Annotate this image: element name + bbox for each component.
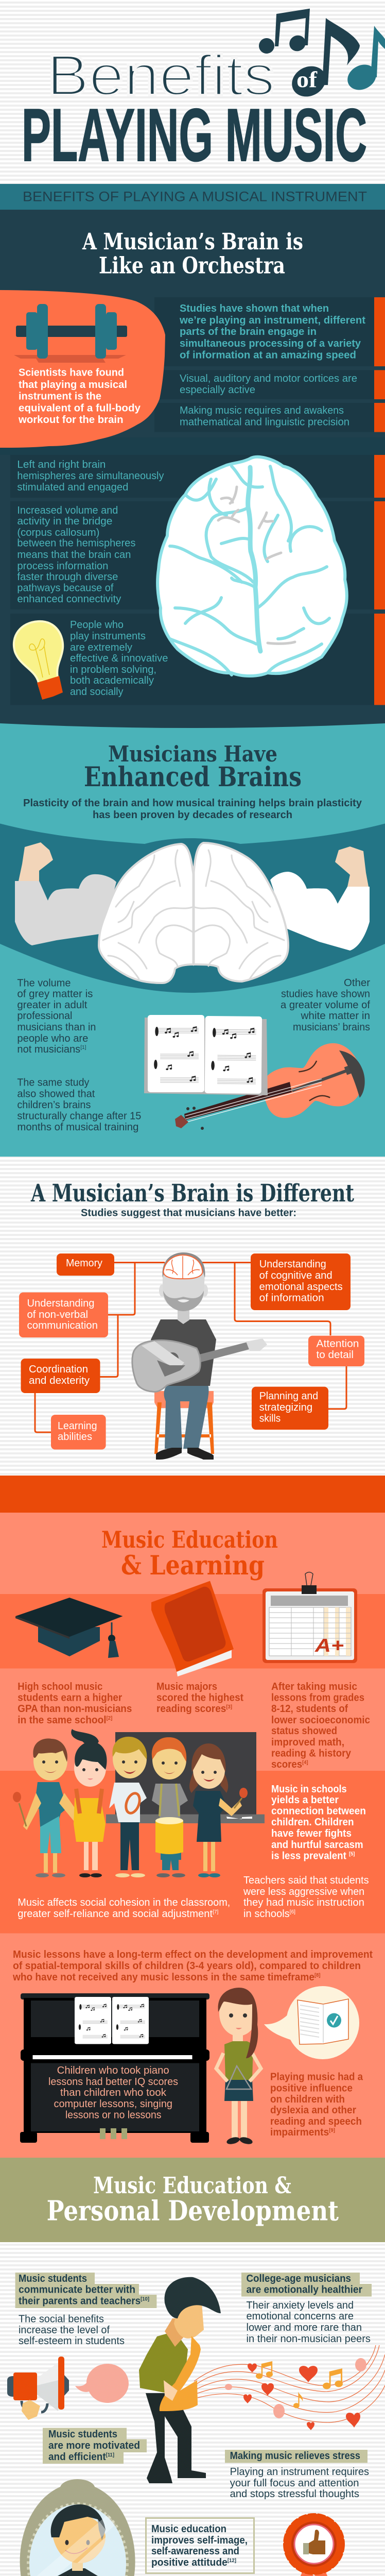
panel: personal development content bbox=[0, 2242, 385, 2576]
text: workout: Scientists have found bbox=[19, 367, 124, 379]
illustration: right arm bbox=[270, 846, 370, 951]
panel: personal development heading: Personal Development bbox=[47, 2195, 339, 2227]
text: socioeconomic: reading & history bbox=[271, 1748, 352, 1759]
icon: large note with the word of bbox=[287, 18, 360, 103]
text: spatial-temporal: [8] bbox=[314, 1973, 321, 1978]
text: communicate better: [10] bbox=[141, 2297, 149, 2302]
head and neck bbox=[159, 1252, 208, 1324]
text: motivated bbox=[48, 2429, 140, 2463]
icon: megaphone bbox=[7, 2357, 69, 2420]
text: white matter: studies have shown bbox=[281, 989, 370, 1000]
guitar bbox=[132, 1338, 267, 1392]
text: simultaneous processing: parts of the brain engage in bbox=[180, 326, 317, 337]
box: cognitive bbox=[251, 1253, 351, 1310]
illustration: girl with maraca bbox=[189, 1743, 248, 1877]
text: spatial-temporal: of spatial-temporal skills of children (3-4 years old), compared to children bbox=[13, 1960, 361, 1972]
icon: brain in head bbox=[163, 1255, 202, 1279]
illustration: boy with drum bbox=[152, 1737, 188, 1877]
illustration: boy with tambourine bbox=[109, 1737, 147, 1877]
heading: & Learning bbox=[121, 1550, 265, 1581]
panel: title header bbox=[0, 0, 385, 184]
text: plasticity: Plasticity of the brain and how musical training helps brain plasticity bbox=[23, 798, 362, 809]
text: subhead: Studies suggest that musicians have better: bbox=[81, 1208, 296, 1219]
heading: A Musician’s Brain is bbox=[82, 229, 303, 255]
text: mathematical precision bbox=[180, 405, 349, 428]
text: anxiety levels: in their non-musician peers bbox=[246, 2333, 371, 2345]
title: Benefits: Benefits bbox=[47, 43, 275, 107]
box: self-image bbox=[146, 2518, 254, 2573]
text: full focus: and stops stressful thoughts bbox=[230, 2488, 359, 2500]
text: cortices: especially active bbox=[180, 384, 255, 396]
text: grey matter: The volume bbox=[17, 977, 71, 989]
text: motivated: are more motivated bbox=[48, 2440, 140, 2451]
text: motivated: [11] bbox=[106, 2452, 114, 2458]
text: socioeconomic: 8-12, students of bbox=[271, 1703, 348, 1715]
text: IQ scores: computer lessons, singing bbox=[54, 2098, 172, 2110]
box: non-verbal: Understanding bbox=[27, 1298, 95, 1309]
panel: a musician's brain is different bbox=[0, 1157, 385, 1476]
text: corpus callosum: faster through diverse bbox=[17, 571, 118, 583]
text: teachers: they had music instruction bbox=[243, 1897, 364, 1908]
subtitle band: BENEFITS OF PLAYING A MUSICAL INSTRUMENT bbox=[23, 189, 367, 204]
text: simultaneous processing: we’re playing an instrument, different bbox=[179, 315, 365, 326]
heading bbox=[101, 1526, 278, 1581]
icon: report card with A plus: A+ bbox=[314, 1635, 344, 1656]
text: structural change bbox=[17, 1077, 141, 1133]
box: learning bbox=[51, 1415, 106, 1450]
text: corpus callosum: Increased volume and bbox=[17, 505, 118, 516]
illustration: large brain bbox=[99, 843, 288, 983]
text: communicate better: Music students bbox=[19, 2273, 87, 2284]
box: memory: Memory bbox=[66, 1258, 102, 1269]
text: emotionally healthier bbox=[246, 2273, 362, 2296]
text: people who play: People who bbox=[70, 619, 124, 631]
text: anxiety levels: Their anxiety levels and bbox=[246, 2300, 354, 2311]
text: hemispheres bbox=[17, 459, 164, 493]
text: corpus callosum: process information bbox=[17, 561, 108, 572]
text: relieves stress: Making music relieves stress bbox=[230, 2450, 360, 2462]
icon: pink speech bubble bbox=[75, 2364, 129, 2403]
box: attention: Attention bbox=[316, 1338, 359, 1350]
text: corpus callosum bbox=[17, 505, 135, 605]
panel: music education and learning bbox=[0, 1476, 385, 2158]
icon: report card with A plus bbox=[262, 1572, 357, 1663]
heading: Music Education bbox=[101, 1526, 278, 1553]
text: connection between children: yields a better bbox=[271, 1794, 339, 1806]
box: non-verbal: communication bbox=[27, 1320, 98, 1331]
text: corpus callosum: pathways because of bbox=[17, 582, 114, 594]
text: socioeconomic: lessons from grades bbox=[271, 1692, 364, 1703]
text: reading scores bbox=[156, 1681, 243, 1715]
heading bbox=[84, 741, 302, 793]
text: grey matter: not musicians bbox=[17, 1044, 80, 1055]
illustration: open sheet music book bbox=[144, 1015, 268, 1095]
text: white matter: a greater volume of bbox=[281, 999, 370, 1011]
box: coordination: Coordination bbox=[29, 1364, 88, 1375]
text: grey matter bbox=[17, 977, 96, 1055]
heading: Musicians Have bbox=[108, 741, 277, 767]
text: full focus: Playing an instrument requires bbox=[230, 2466, 369, 2478]
text: mathematical precision: Making music requires and awakens bbox=[180, 405, 344, 416]
text: socioeconomic bbox=[271, 1681, 370, 1770]
box: learning: abilities bbox=[58, 1431, 92, 1443]
text: workout: equivalent of a full-body bbox=[19, 402, 141, 414]
text: self-esteem: self-esteem in students bbox=[19, 2335, 125, 2347]
text: grey matter: greater in adult bbox=[17, 999, 87, 1011]
text: anxiety levels: lower and more rare than bbox=[246, 2322, 362, 2333]
text: IQ scores bbox=[48, 2065, 178, 2121]
icon: large note with the word of: of bbox=[296, 67, 318, 92]
stool bbox=[154, 1391, 214, 1454]
text: teachers: Teachers said that students bbox=[243, 1875, 369, 1886]
torso bbox=[151, 1319, 216, 1386]
text: people who play: both academically bbox=[70, 675, 154, 686]
text: social cohesion bbox=[18, 1897, 230, 1920]
illustration: brain top view bbox=[157, 457, 347, 676]
text: plasticity bbox=[23, 798, 362, 821]
text: anxiety levels: emotional concerns are bbox=[246, 2311, 354, 2322]
text: structural change: also showed that bbox=[17, 1088, 95, 1099]
box: planning: skills bbox=[259, 1413, 281, 1425]
text: anxiety levels bbox=[246, 2300, 371, 2345]
text: structural change: months of musical training bbox=[17, 1122, 138, 1133]
text: socioeconomic: improved math, bbox=[271, 1737, 344, 1748]
box: memory bbox=[57, 1253, 114, 1276]
text: self-esteem: increase the level of bbox=[19, 2325, 110, 2336]
heading: Enhanced Brains bbox=[84, 761, 302, 793]
text: structural change: The same study bbox=[17, 1077, 89, 1088]
box: planning: strategizing bbox=[259, 1402, 312, 1413]
text: GPA: GPA than non-musicians bbox=[18, 1703, 132, 1715]
text: white matter: Other bbox=[344, 977, 370, 989]
icon: rosette with thumb up bbox=[284, 2514, 344, 2576]
text: dyslexia: reading and speech bbox=[270, 2116, 362, 2127]
text: structural change: structurally change after 15 bbox=[17, 1111, 141, 1122]
illustration: left arm bbox=[15, 842, 116, 945]
text: social cohesion: greater self-reliance and social adjustment bbox=[18, 1908, 211, 1920]
text: socioeconomic: After taking music bbox=[271, 1681, 357, 1692]
panel: workout callout bbox=[0, 290, 165, 448]
icon: barbell bbox=[14, 304, 127, 363]
text: hemispheres: stimulated and engaged bbox=[17, 482, 128, 493]
text: self-esteem bbox=[19, 2313, 125, 2347]
text: social cohesion: Music affects social cohesion in the classroom, bbox=[18, 1897, 230, 1908]
text: corpus callosum: (corpus callosum) bbox=[17, 527, 99, 538]
illustration: guitarist on a stool bbox=[132, 1252, 267, 1460]
text: corpus callosum: enhanced connectivity bbox=[17, 594, 121, 605]
box: cognitive: emotional aspects bbox=[259, 1281, 343, 1293]
icon: book bbox=[151, 1581, 234, 1676]
text: workout: workout for the brain bbox=[18, 414, 124, 426]
icon: graduation cap bbox=[15, 1598, 122, 1658]
text: spatial-temporal: Music lessons have a long-term effect on the development and improvement bbox=[13, 1949, 373, 1960]
callout bars bbox=[13, 2273, 379, 2576]
jeans bbox=[164, 1381, 209, 1449]
heading bbox=[82, 229, 303, 279]
box: self-image: improves self-image, bbox=[151, 2535, 248, 2546]
text: socioeconomic: scores bbox=[271, 1759, 305, 1770]
box: coordination bbox=[21, 1359, 100, 1393]
text: people who play bbox=[70, 619, 168, 698]
text: grey matter: people who are bbox=[17, 1033, 88, 1044]
text: dyslexia: dyslexia and other bbox=[270, 2105, 356, 2116]
text: white matter: musicians’ brains bbox=[293, 1022, 370, 1033]
text: IQ scores: than children who took bbox=[60, 2087, 167, 2098]
illustration: speech bubble with book bbox=[264, 1986, 359, 2059]
text: structural change: children’s brains bbox=[17, 1099, 91, 1111]
text: reading scores: scored the highest bbox=[156, 1692, 243, 1703]
illustration: upright piano bbox=[20, 1993, 209, 2143]
connector lines bbox=[35, 1262, 346, 1432]
text: IQ scores: lessons or no lessons bbox=[65, 2109, 162, 2121]
box: self-image: Music education bbox=[151, 2523, 226, 2535]
illustration: music staff with hearts bbox=[194, 2345, 385, 2430]
illustration: girl with triangle bbox=[216, 1988, 261, 2145]
text: people who play: in problem solving, bbox=[70, 664, 156, 675]
text: grey matter: [1] bbox=[80, 1045, 86, 1050]
text: connection between children: is less prevalent bbox=[271, 1851, 352, 1862]
icon: teal note bbox=[343, 26, 385, 95]
box: non-verbal: of non-verbal bbox=[27, 1309, 88, 1320]
text: GPA: in the same school bbox=[18, 1715, 110, 1726]
text: workout: instrument is the bbox=[19, 391, 101, 402]
text: social cohesion: [7] bbox=[213, 1909, 219, 1915]
text: motivated: and efficient bbox=[48, 2451, 109, 2463]
text: full focus: your full focus and attention bbox=[230, 2478, 359, 2489]
panel: personal development heading bbox=[0, 2158, 385, 2242]
text: white matter bbox=[281, 977, 370, 1033]
shoes bbox=[156, 1448, 214, 1460]
panel: personal development heading: Music Education & bbox=[93, 2173, 291, 2199]
text: dyslexia: impairments bbox=[270, 2127, 331, 2138]
text: communicate better: their parents and teachers bbox=[19, 2296, 147, 2307]
text: simultaneous processing bbox=[179, 303, 365, 361]
illustration: violin bbox=[175, 1036, 372, 1130]
text: dyslexia bbox=[270, 2072, 363, 2138]
text: teachers bbox=[243, 1875, 369, 1920]
text: grey matter: professional bbox=[17, 1010, 72, 1022]
box: planning: Planning and bbox=[259, 1391, 318, 1402]
text: reading scores: reading scores bbox=[156, 1703, 230, 1715]
text: communicate better: communicate better with bbox=[19, 2284, 135, 2296]
text: corpus callosum: between the hemispheres bbox=[17, 538, 135, 549]
box: cognitive: Understanding bbox=[259, 1259, 326, 1270]
text: full focus bbox=[230, 2466, 369, 2500]
text: cortices bbox=[180, 373, 357, 396]
text: emotionally healthier: College-age musicians bbox=[246, 2273, 351, 2284]
text: connection between children: [5] bbox=[349, 1852, 355, 1857]
text: teachers: [6] bbox=[290, 1909, 295, 1915]
text: GPA: High school music bbox=[18, 1681, 102, 1692]
text: GPA: students earn a higher bbox=[18, 1692, 122, 1703]
text: simultaneous processing: simultaneous processing of a variety bbox=[180, 338, 361, 349]
text: corpus callosum: activity in the bridge bbox=[17, 516, 112, 527]
text: GPA bbox=[18, 1681, 132, 1726]
text: self-esteem: The social benefits bbox=[19, 2313, 104, 2325]
text: IQ scores: Children who took piano bbox=[57, 2065, 169, 2076]
text: workout: that playing a musical bbox=[19, 379, 127, 391]
text: reading scores: [3] bbox=[226, 1704, 232, 1710]
background band bbox=[0, 823, 385, 993]
text: socioeconomic: lower socioeconomic bbox=[271, 1715, 370, 1726]
box: self-image: self-awareness and bbox=[151, 2546, 239, 2557]
box: learning: Learning bbox=[58, 1420, 97, 1432]
text: motivated: Music students bbox=[48, 2429, 117, 2440]
box: planning bbox=[252, 1387, 328, 1430]
text: dyslexia: on children with bbox=[270, 2094, 345, 2105]
heading: Like an Orchestra bbox=[99, 253, 285, 279]
text: spatial-temporal bbox=[12, 1949, 373, 1983]
orange side strips bbox=[374, 297, 385, 705]
text: hemispheres: hemispheres are simultaneously bbox=[17, 470, 164, 482]
panel: musicians have enhanced brains bbox=[0, 723, 385, 1157]
text: connection between children: have fewer fights bbox=[271, 1828, 352, 1839]
row backgrounds bbox=[10, 297, 374, 705]
text: socioeconomic: status showed bbox=[271, 1725, 337, 1737]
text: cortices: Visual, auditory and motor cortices are bbox=[180, 373, 357, 384]
text: connection between children: connection between bbox=[271, 1806, 366, 1817]
box: attention bbox=[308, 1336, 364, 1366]
text: people who play: effective & innovative bbox=[70, 653, 168, 664]
text: dyslexia: [9] bbox=[329, 2128, 335, 2133]
text: connection between children: Music in schools bbox=[271, 1784, 347, 1795]
text: white matter: white matter in bbox=[300, 1010, 370, 1022]
illustration: girl in yellow dress bbox=[71, 1729, 107, 1877]
text: spatial-temporal: who have not received any music lessons in the same timeframe bbox=[13, 1972, 329, 1983]
text: mathematical precision: mathematical and linguistic precision bbox=[180, 416, 349, 428]
illustration: blackboard bbox=[106, 1732, 265, 1823]
text: hemispheres: Left and right brain bbox=[17, 459, 106, 470]
text: simultaneous processing: of information at an amazing speed bbox=[180, 350, 356, 361]
text: grey matter: musicians than in bbox=[17, 1022, 96, 1033]
text: GPA: [2] bbox=[107, 1716, 112, 1721]
text: communicate better bbox=[19, 2273, 149, 2307]
text: reading scores: Music majors bbox=[156, 1681, 217, 1692]
box: self-image: positive attitude bbox=[151, 2557, 230, 2568]
box: non-verbal bbox=[19, 1292, 108, 1337]
text: socioeconomic: [4] bbox=[302, 1760, 308, 1766]
box: cognitive: of cognitive and bbox=[259, 1270, 332, 1281]
subtitle band bbox=[0, 184, 385, 210]
icon: light bulb bbox=[14, 621, 63, 700]
text: plasticity: has been proven by decades of research bbox=[93, 809, 292, 821]
icon: beamed music notes bbox=[256, 9, 310, 56]
box: cognitive: of information bbox=[259, 1292, 324, 1303]
text: people who play: are extremely bbox=[70, 642, 132, 653]
text: dyslexia: Playing music had a bbox=[270, 2072, 363, 2083]
box: self-image: [12] bbox=[227, 2558, 236, 2564]
text: connection between children: children. Children bbox=[271, 1817, 354, 1828]
text: grey matter: of grey matter is bbox=[17, 989, 93, 1000]
text: simultaneous processing: Studies have shown that when bbox=[180, 303, 329, 314]
text: emotionally healthier: are emotionally healthier bbox=[246, 2284, 362, 2296]
panel: brain is like an orchestra bbox=[0, 210, 385, 733]
text: dyslexia: positive influence bbox=[270, 2083, 353, 2094]
box: coordination: and dexterity bbox=[29, 1375, 90, 1386]
text: people who play: and socially bbox=[70, 686, 124, 698]
text: teachers: were less aggressive when bbox=[243, 1886, 364, 1897]
text: teachers: in schools bbox=[243, 1908, 289, 1920]
illustration: saxophone player bbox=[139, 2277, 221, 2483]
text: workout bbox=[18, 367, 141, 426]
text: people who play: play instruments bbox=[70, 631, 146, 642]
text: connection between children bbox=[271, 1784, 366, 1862]
text: IQ scores: lessons had better IQ scores bbox=[48, 2076, 178, 2088]
box: attention: to detail bbox=[316, 1349, 354, 1361]
illustration: mirror with boy bbox=[20, 2479, 135, 2576]
text: connection between children: and hurtful sarcasm bbox=[271, 1839, 363, 1851]
text: corpus callosum: means that the brain can bbox=[17, 549, 131, 561]
illustration: boy with maracas bbox=[13, 1738, 82, 1877]
